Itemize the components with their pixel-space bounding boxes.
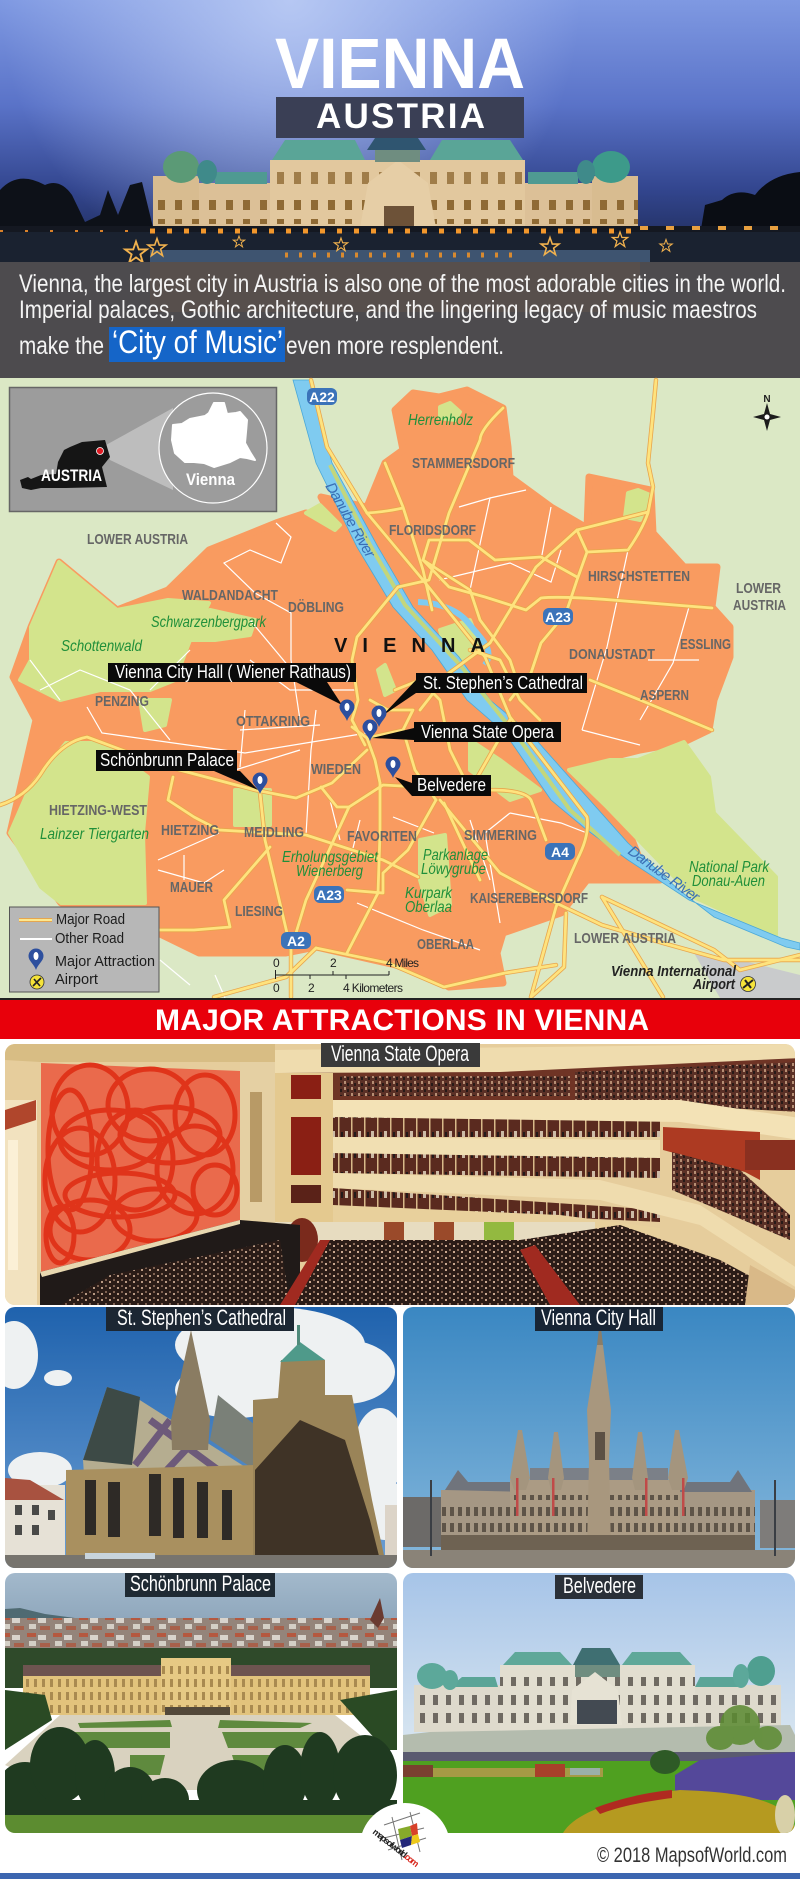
palace wings bbox=[153, 183, 638, 231]
photo: Schönbrunn Palace: Schönbrunn Palace bbox=[130, 1571, 271, 1596]
inset locator map bbox=[10, 388, 276, 512]
legend: Major Road bbox=[56, 911, 125, 928]
major roads bbox=[0, 380, 800, 997]
legend: Airport bbox=[55, 971, 99, 988]
street bbox=[5, 1555, 397, 1568]
district labels: FAVORITEN bbox=[347, 828, 417, 845]
Danube canal bbox=[418, 602, 489, 665]
district labels: HIETZING-WEST bbox=[49, 802, 147, 819]
park labels: Oberlaa bbox=[405, 899, 452, 916]
icon: airport bbox=[740, 976, 756, 992]
central pediment bbox=[570, 1672, 622, 1725]
river island bbox=[330, 465, 620, 855]
central tower bbox=[587, 1345, 611, 1550]
curtain bbox=[41, 1063, 240, 1272]
callout: Vienna State Opera bbox=[372, 722, 561, 742]
lamps bbox=[431, 1480, 775, 1556]
title: VIENNA: VIENNA bbox=[275, 25, 525, 104]
park labels: Lainzer Tiergarten bbox=[40, 826, 149, 843]
callout: St. Stephen's Cathedral: St. Stephen’s Cathedral bbox=[423, 673, 583, 693]
top tier bbox=[285, 1058, 795, 1100]
inset locator map: Vienna bbox=[186, 470, 235, 489]
intro text panel bbox=[0, 262, 800, 378]
Danube river bbox=[293, 380, 800, 950]
district labels: LOWER AUSTRIA bbox=[87, 531, 188, 548]
park labels: Donau-Auen bbox=[692, 873, 765, 890]
scale bar: 0 bbox=[273, 956, 280, 970]
roofs bbox=[272, 140, 365, 160]
palace bbox=[23, 1675, 370, 1715]
district labels: ESSLING bbox=[680, 636, 731, 653]
subtitle banner: AUSTRIA: AUSTRIA bbox=[316, 97, 485, 136]
district labels: LOWER bbox=[736, 580, 781, 597]
flower strip bbox=[403, 1752, 795, 1762]
river labels bbox=[322, 480, 703, 906]
highway shields: A23 bbox=[316, 887, 342, 903]
airport label bbox=[611, 963, 737, 993]
district labels: AUSTRIA bbox=[733, 597, 786, 614]
park labels: Erholungsgebiet bbox=[282, 849, 378, 866]
pool bbox=[403, 1725, 795, 1752]
district labels: WALDANDACHT bbox=[182, 587, 278, 604]
gardens bbox=[5, 1715, 385, 1790]
town bbox=[5, 1618, 397, 1648]
callout: Schönbrunn Palace bbox=[96, 750, 258, 790]
trees right bbox=[700, 172, 800, 240]
arcade bbox=[441, 1535, 755, 1550]
orchestra and audience bbox=[280, 1225, 795, 1305]
park labels: Parkanlage bbox=[423, 847, 488, 864]
photo: Vienna City Hall bbox=[403, 1305, 795, 1568]
left balcony bbox=[5, 1100, 37, 1305]
callout: Vienna City Hall bbox=[108, 662, 356, 705]
highway shields bbox=[281, 388, 575, 949]
legend bbox=[10, 907, 159, 992]
park labels: Kurpark bbox=[405, 885, 453, 902]
photo: Vienna State Opera: Vienna State Opera bbox=[331, 1041, 470, 1066]
right building bbox=[385, 1505, 397, 1560]
trees left bbox=[0, 179, 155, 240]
header photo: Belvedere at dusk bbox=[0, 0, 800, 264]
district labels: OTTAKRING bbox=[236, 713, 310, 730]
section heading band: MAJOR ATTRACTIONS IN VIENNA bbox=[155, 1004, 649, 1037]
boxes column bbox=[275, 1073, 333, 1223]
district labels: HIRSCHSTETTEN bbox=[588, 568, 690, 585]
scale bar: 2 bbox=[330, 956, 337, 970]
compass: N bbox=[763, 394, 771, 405]
district labels: LIESING bbox=[235, 903, 283, 920]
clouds bbox=[0, 1307, 409, 1540]
ground bbox=[0, 231, 800, 262]
purple flowers bbox=[675, 1752, 795, 1800]
district labels: DÖBLING bbox=[288, 599, 344, 616]
photo: Vienna City Hall: Vienna City Hall bbox=[541, 1305, 656, 1330]
palace body bbox=[414, 1685, 781, 1732]
photo: Vienna State Opera bbox=[5, 1041, 800, 1305]
footer band bbox=[0, 1873, 800, 1879]
photo: Belvedere: Belvedere bbox=[563, 1573, 636, 1598]
flags bbox=[516, 1478, 684, 1516]
foreground trees bbox=[0, 1727, 397, 1823]
right rail bbox=[745, 1265, 795, 1305]
light stars bbox=[125, 232, 672, 262]
callout: Belvedere bbox=[395, 775, 491, 796]
district labels: DONAUSTADT bbox=[569, 646, 655, 663]
map of Vienna bbox=[0, 378, 800, 1000]
central pediment bbox=[360, 160, 436, 228]
main facade bbox=[441, 1490, 755, 1535]
tree line bbox=[5, 1648, 397, 1688]
district labels: STAMMERSDORF bbox=[412, 455, 515, 472]
parterre wall bbox=[275, 1222, 595, 1244]
park labels: Löwygrube bbox=[421, 861, 486, 878]
callout: Vienna City Hall: Vienna City Hall ( Wiener Rathaus) bbox=[115, 662, 351, 682]
side pillar bbox=[240, 1062, 275, 1232]
district labels bbox=[49, 455, 786, 953]
district labels: LOWER AUSTRIA bbox=[574, 930, 676, 947]
church spire bbox=[370, 1598, 384, 1628]
map pins bbox=[252, 700, 400, 794]
district labels: ASPERN bbox=[640, 687, 689, 704]
left building bbox=[5, 1485, 65, 1555]
end pavilions bbox=[153, 176, 199, 231]
river labels: Danube River bbox=[625, 842, 703, 906]
highway shields: A23 bbox=[545, 609, 571, 625]
mid flower bed bbox=[403, 1768, 603, 1777]
reflection pool bbox=[150, 250, 650, 264]
subtitle banner: AUSTRIA bbox=[276, 97, 524, 138]
photo: St. Stephen's Cathedral: St. Stephen’s Cathedral bbox=[117, 1305, 286, 1330]
park labels: Schwarzenbergpark bbox=[151, 614, 267, 631]
roof bbox=[83, 1387, 243, 1470]
tier rails and boxes bbox=[333, 1117, 660, 1137]
highway shields: A4 bbox=[551, 844, 569, 860]
palace centre block bbox=[270, 160, 525, 231]
district labels: MEIDLING bbox=[244, 824, 304, 841]
callout: Belvedere: Belvedere bbox=[417, 775, 486, 795]
compass bbox=[753, 394, 781, 431]
park labels: Wienerberg bbox=[296, 863, 363, 880]
lawn bbox=[5, 1815, 397, 1833]
legend: Other Road bbox=[55, 930, 124, 947]
inset locator map: AUSTRIA bbox=[41, 466, 102, 485]
distant hills bbox=[5, 1608, 74, 1618]
district labels: MAUER bbox=[170, 879, 213, 896]
market lights bbox=[150, 228, 640, 234]
district labels: HIETZING bbox=[161, 822, 219, 839]
district labels: FLORIDSDORF bbox=[389, 522, 476, 539]
district labels: WIEDEN bbox=[311, 761, 361, 778]
side buildings bbox=[403, 1497, 443, 1547]
intro text panel: ‘City of Music’ bbox=[112, 324, 283, 360]
scale bar: 2 bbox=[308, 981, 315, 995]
other roads bbox=[30, 490, 699, 998]
spire bbox=[171, 1330, 210, 1450]
city label: VIENNA: VIENNA bbox=[334, 635, 485, 657]
proscenium top bbox=[5, 1044, 275, 1062]
parks bbox=[10, 403, 776, 935]
walls bbox=[66, 1465, 255, 1560]
airport label: Airport bbox=[692, 976, 736, 993]
scale bar: 4 Miles bbox=[386, 956, 419, 970]
photo: Belvedere bbox=[403, 1573, 795, 1835]
airport label: Vienna International bbox=[611, 963, 737, 980]
photo: Schönbrunn Palace bbox=[0, 1571, 397, 1833]
section heading band bbox=[0, 998, 800, 1039]
legend: Major Attraction bbox=[55, 953, 155, 970]
park labels: Herrenholz bbox=[408, 412, 473, 429]
airport grounds bbox=[694, 953, 800, 998]
Vienna outline bbox=[172, 403, 255, 467]
district labels: PENZING bbox=[95, 693, 149, 710]
scale bar: 4 Kilometers bbox=[343, 981, 403, 995]
highway shields: A2 bbox=[287, 933, 305, 949]
scale bar: 0 bbox=[273, 981, 280, 995]
district labels: KAISEREBERSDORF bbox=[470, 890, 588, 907]
tree bbox=[706, 1705, 782, 1750]
intro text panel: make the bbox=[19, 332, 104, 360]
side spires bbox=[510, 1430, 530, 1480]
intro text panel: even more resplendent. bbox=[286, 332, 504, 360]
side hedges bbox=[5, 1690, 52, 1750]
plaza bbox=[403, 1550, 795, 1568]
stage base bbox=[40, 1220, 300, 1305]
yellow flowers bbox=[563, 1790, 795, 1833]
south tower bbox=[253, 1360, 385, 1560]
park labels: Schottenwald bbox=[61, 638, 143, 655]
roofs bbox=[530, 1468, 668, 1480]
callout: St. Stephen's Cathedral bbox=[382, 673, 587, 716]
logo: MapsofWorld bbox=[360, 1803, 450, 1879]
lawn bbox=[403, 1761, 795, 1833]
highway shields: A22 bbox=[309, 389, 335, 405]
park labels: National Park bbox=[689, 859, 770, 876]
callout: Vienna State Opera: Vienna State Opera bbox=[421, 722, 555, 742]
river labels: Danube River bbox=[322, 480, 379, 562]
district labels: SIMMERING bbox=[464, 827, 537, 844]
red wall bbox=[663, 1127, 760, 1180]
photo: St. Stephen's Cathedral bbox=[0, 1305, 409, 1568]
park labels bbox=[40, 412, 770, 916]
district labels: OBERLAA bbox=[417, 936, 474, 953]
scale bar bbox=[273, 956, 419, 995]
callout: Schönbrunn Palace: Schönbrunn Palace bbox=[100, 750, 234, 770]
city area bbox=[10, 390, 730, 987]
logo: MapsofWorld: mapsofworld.com bbox=[371, 1827, 421, 1869]
Austria outline bbox=[20, 440, 110, 490]
roofs bbox=[503, 1652, 572, 1665]
